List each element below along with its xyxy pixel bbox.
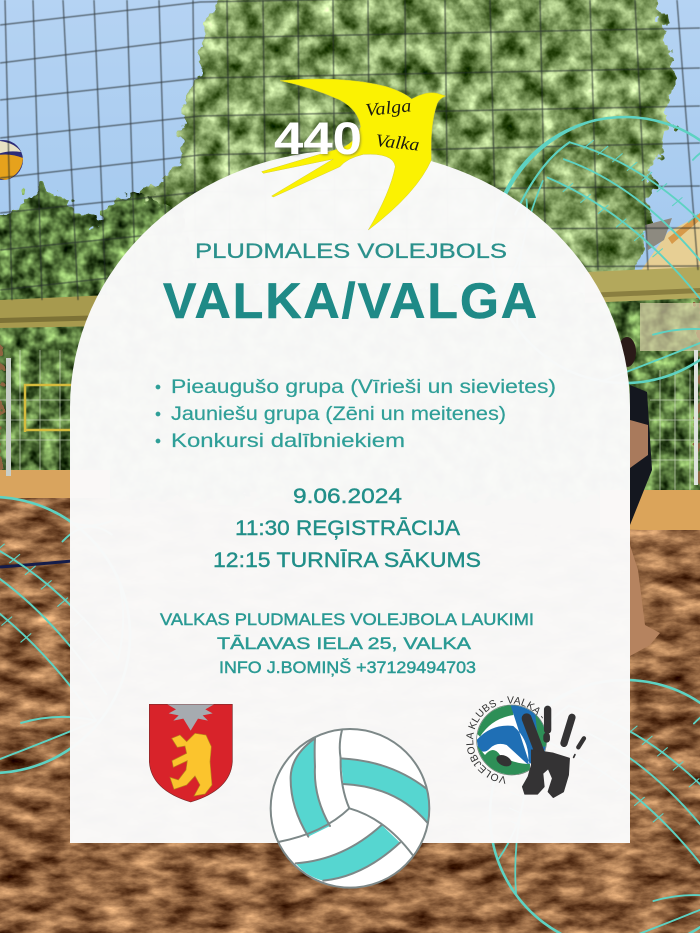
central birch tree <box>120 0 672 290</box>
person standing behind panel <box>618 337 660 656</box>
decorative line ball: bottom right <box>473 663 700 933</box>
icon: coat of arms of Valka <box>149 704 232 802</box>
list: participant groups: Konkursi dalībniekiem <box>171 431 405 452</box>
list: participant groups: Pieaugušo grupa (Vīrieši un sievietes) <box>171 377 556 398</box>
icon: volleyball club logo <box>466 696 586 798</box>
text block: date and times: 12:15 TURNĪRA SĀKUMS <box>213 549 481 572</box>
text block: location and contact: VALKAS PLUDMALES VOLEJBOLA LAUKIMI <box>160 610 534 629</box>
net cable <box>0 561 72 567</box>
volleyball net <box>0 0 700 300</box>
title: VALKA/VALGA <box>163 273 537 329</box>
net top band <box>0 295 110 328</box>
decorative line ball: left <box>0 479 148 791</box>
house on right <box>640 213 700 351</box>
bird silhouette <box>262 79 446 230</box>
handprint <box>523 709 584 797</box>
bird logo <box>262 79 446 230</box>
orange dry sand <box>0 470 110 500</box>
text block: location and contact: TĀLAVAS IELA 25, VALKA <box>217 634 472 653</box>
text block: location and contact <box>160 610 534 677</box>
text block: date and times: 9.06.2024 <box>293 485 402 508</box>
left spruce tree <box>0 182 200 310</box>
icon: volleyball <box>271 729 429 888</box>
fence wires and posts <box>0 350 700 490</box>
bird text: Valga: Valga <box>364 95 412 120</box>
text block: location and contact: INFO J.BOMIŅŠ +37129494703 <box>219 658 476 677</box>
volleyball in the air <box>0 140 23 180</box>
list: participant groups <box>156 377 556 452</box>
panel: arch-shaped content card <box>70 150 630 843</box>
logo ball <box>476 704 547 776</box>
anniversary number: 440 <box>274 113 362 164</box>
logo ring text: VOLEJBOLA KLUBS - VALKA - <box>466 696 543 784</box>
decorative line ball: top right <box>475 100 700 400</box>
heading: sport name: PLUDMALES VOLEJBOLS <box>195 240 507 263</box>
text block: date and times <box>213 485 481 572</box>
list: participant groups: Jauniešu grupa (Zēni un meitenes) <box>171 404 506 425</box>
mid green band behind court <box>0 285 700 500</box>
text block: date and times: 11:30 REĢISTRĀCIJA <box>235 517 460 540</box>
bird text: Valka: Valka <box>375 130 420 155</box>
brown sand <box>0 498 700 933</box>
sky <box>0 0 700 290</box>
